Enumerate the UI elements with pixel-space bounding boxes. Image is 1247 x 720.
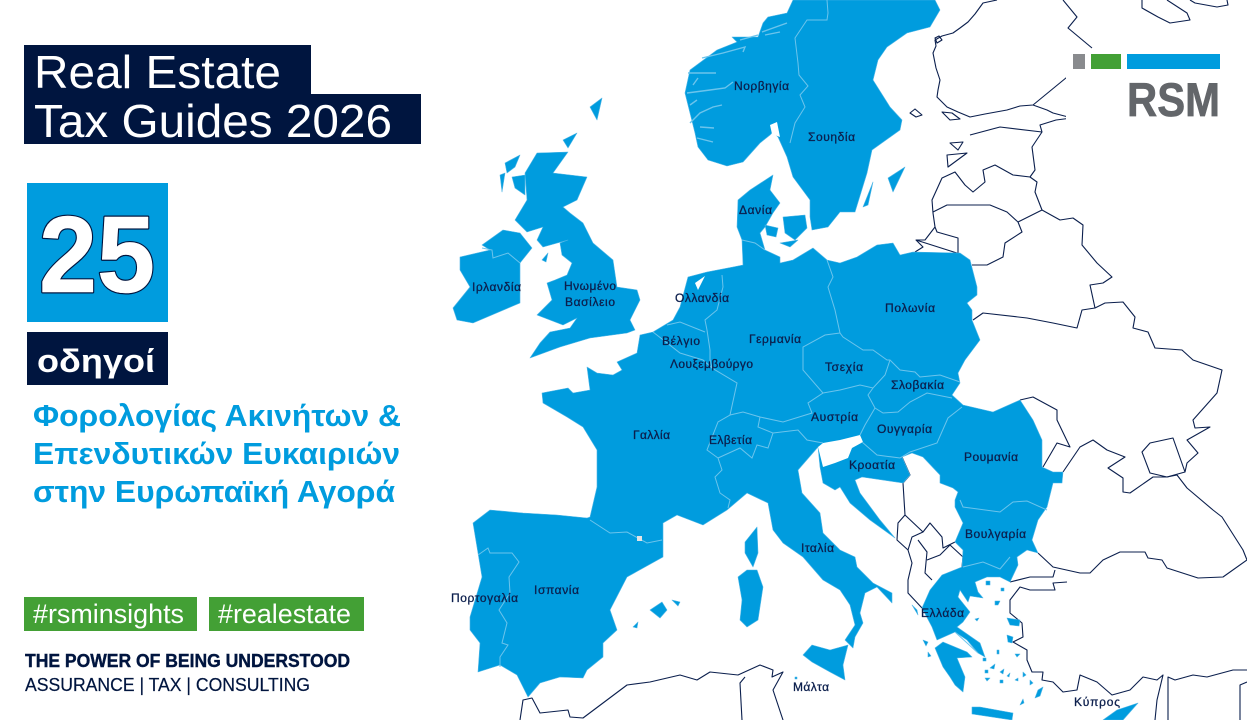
label Ireland: Ιρλανδία <box>472 280 521 294</box>
guides label background <box>27 332 168 385</box>
guides label <box>27 332 168 385</box>
Andorra <box>637 536 642 541</box>
title line one: Real Estate <box>34 46 281 98</box>
hashtag background two <box>209 597 364 631</box>
label Slovakia: Σλοβακία <box>891 378 944 392</box>
map: white cut-outs (Slovenia, IJsselmeer) <box>695 122 863 467</box>
number badge 25 <box>27 183 168 322</box>
label Austria: Αυστρία <box>811 410 858 424</box>
label Portugal: Πορτογαλία <box>451 591 518 605</box>
label Czechia: Τσεχία <box>825 360 863 374</box>
subtitle <box>33 399 401 509</box>
label Norway: Νορβηγία <box>734 79 789 93</box>
label Switzerland: Ελβετία <box>709 433 752 447</box>
label Sweden: Σουηδία <box>808 130 855 144</box>
label Croatia: Κροατία <box>849 458 895 472</box>
hashtag realestate <box>209 597 364 631</box>
logo grey block <box>1073 54 1085 69</box>
tagline line one: THE POWER OF BEING UNDERSTOOD <box>25 651 350 671</box>
hashtag rsminsights <box>24 597 197 631</box>
badge number outline: 25 <box>39 194 155 316</box>
Ireland <box>453 230 532 323</box>
label Belgium: Βέλγιο <box>662 334 700 348</box>
logo mask <box>1066 50 1226 122</box>
label Germany: Γερμανία <box>749 332 801 346</box>
logo blue block <box>1127 54 1220 69</box>
label Cyprus: Κύπρος <box>1074 695 1120 709</box>
label Italy: Ιταλία <box>801 541 834 555</box>
guides label text: οδηγοί <box>37 343 155 379</box>
label Romania: Ρουμανία <box>964 450 1018 464</box>
label Denmark: Δανία <box>739 203 772 217</box>
label Greece: Ελλάδα <box>921 606 964 620</box>
subtitle line three: στην Ευρωπαϊκή Αγορά <box>33 475 395 509</box>
badge number: 25 <box>39 194 155 316</box>
label United Kingdom line two: Βασίλειο <box>565 295 615 309</box>
hashtag text two: #realestate <box>218 599 351 629</box>
United Kingdom <box>515 152 640 358</box>
title background line one <box>24 45 311 94</box>
hashtag text one: #rsminsights <box>33 599 184 629</box>
islands <box>738 570 763 627</box>
Scandinavia <box>685 0 940 230</box>
title line two: Tax Guides 2026 <box>34 95 392 147</box>
label Luxembourg: Λουξεμβούργο <box>670 357 753 371</box>
map: internal country borders and fjords <box>478 0 1047 667</box>
label Poland: Πολωνία <box>885 301 935 315</box>
RSM logo <box>1073 54 1220 126</box>
logo green block <box>1091 54 1121 69</box>
label United Kingdom: Ηνωμένο <box>564 279 616 293</box>
subtitle line one: Φορολογίας Ακινήτων & <box>33 399 401 433</box>
hashtag background one <box>24 597 197 631</box>
title block <box>24 45 421 147</box>
title background line two <box>24 94 421 144</box>
badge background <box>27 183 168 322</box>
subtitle line two: Επενδυτικών Ευκαιριών <box>33 437 400 471</box>
label Malta: Μάλτα <box>793 680 829 694</box>
map: covered EU countries in blue <box>453 0 1138 720</box>
label Netherlands: Ολλανδία <box>675 291 729 305</box>
country labels <box>451 79 1120 709</box>
tagline line two: ASSURANCE | TAX | CONSULTING <box>25 674 310 695</box>
tagline <box>25 651 350 695</box>
label France: Γαλλία <box>633 428 670 442</box>
label Hungary: Ουγγαρία <box>877 422 932 436</box>
continental Europe <box>470 175 1063 697</box>
logo wordmark: RSM <box>1127 73 1220 126</box>
label Spain: Ισπανία <box>534 583 579 597</box>
map: neighbouring non-covered countries outlines <box>520 0 1247 720</box>
label Bulgaria: Βουλγαρία <box>965 527 1026 541</box>
